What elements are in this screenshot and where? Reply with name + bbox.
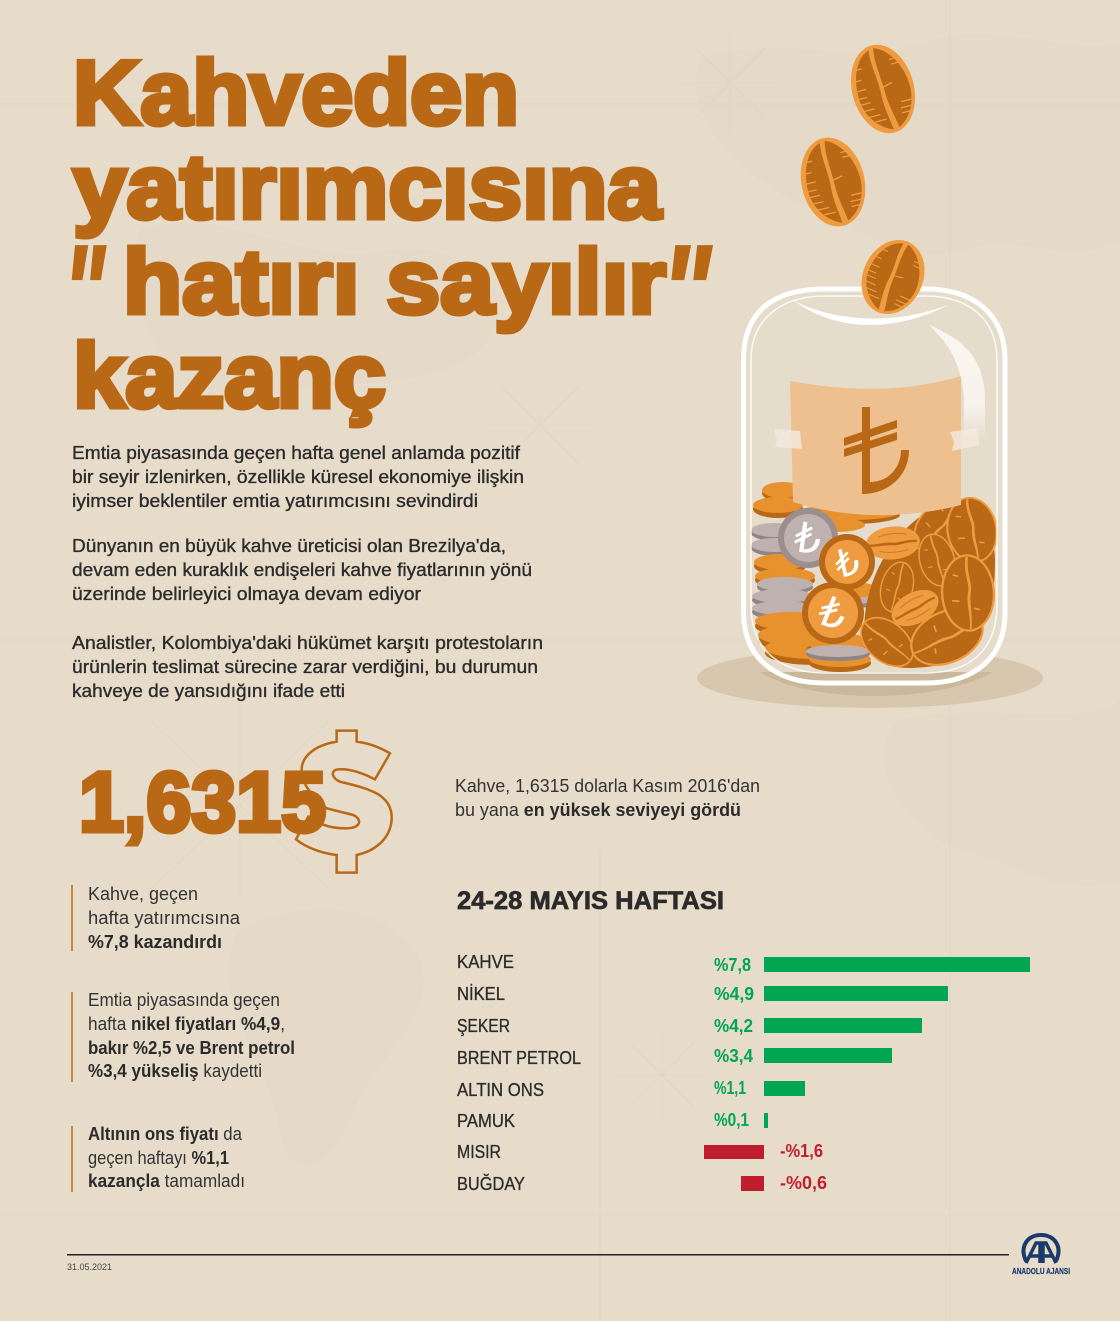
jar shadow — [697, 648, 1043, 708]
row: nikel: NİKEL — [457, 983, 505, 1004]
title: yatırımcısına — [73, 137, 662, 238]
note: coffee gain: Kahve, geçen — [88, 883, 198, 904]
footer rule — [67, 1254, 1009, 1256]
intro text: Emtia piyasasında geçen hafta genel anlamda pozitif — [72, 442, 521, 463]
intro text: bir seyir izlenirken, özellikle küresel ekonomiye ilişkin — [72, 466, 524, 487]
coin: orange lira: ₺ — [831, 541, 864, 587]
title: kazanç — [73, 326, 386, 427]
illustration: coffee beans falling into a jar — [697, 38, 1043, 708]
callout: highest level: Kahve, 1,6315 dolarla Kasım 2016'dan — [455, 775, 760, 796]
row: seker: ŞEKER — [457, 1015, 510, 1036]
note: gold: geçen haftayı %1,1 — [88, 1147, 229, 1168]
jar outline and highlights — [744, 289, 1005, 683]
logo: Anadolu Ajansi: ANADOLU AJANSI — [1012, 1266, 1070, 1276]
note: gold: kazançla tamamladı — [88, 1170, 245, 1191]
coin: orange lira tilted — [802, 582, 864, 644]
note: coffee gain — [71, 883, 241, 952]
price label — [790, 376, 961, 515]
row: altin ons: ALTIN ONS — [457, 1079, 544, 1100]
row: altin ons: %1,1 — [714, 1078, 746, 1098]
row: pamuk: PAMUK — [457, 1110, 516, 1131]
row: bugday — [457, 1173, 827, 1194]
row: misir: MISIR — [457, 1141, 501, 1162]
logo: Anadolu Ajansi — [1012, 1235, 1070, 1276]
intro text: Dünyanın en büyük kahve üreticisi olan Brezilya'da, — [72, 535, 506, 556]
note: nickel, copper, brent — [71, 989, 295, 1082]
row: seker: %4,2 — [714, 1016, 753, 1036]
title: " — [63, 218, 106, 365]
note: nickel, copper, brent: hafta nikel fiyatları %4,9, — [88, 1013, 285, 1034]
row: pamuk — [457, 1110, 768, 1131]
coin: grey lira: ₺ — [791, 513, 824, 564]
note: nickel, copper, brent: %3,4 yükseliş kaydetti — [88, 1060, 262, 1081]
jar glass — [742, 289, 1005, 683]
row: bugday: -%0,6 — [780, 1173, 827, 1193]
title: Kahveden — [73, 43, 519, 144]
title: hatırı sayılır — [123, 232, 666, 333]
note: coffee gain: hafta yatırımcısına — [88, 907, 241, 928]
title — [63, 43, 712, 427]
row: brent petrol: %3,4 — [714, 1046, 753, 1066]
callout: highest level: bu yana en yüksek seviyeyi gördü — [455, 799, 741, 820]
note: nickel, copper, brent: Emtia piyasasında geçen — [88, 989, 280, 1010]
date: 31.05.2021 — [67, 1262, 112, 1272]
intro text: iyimser beklentiler emtia yatırımcısını sevindirdi — [72, 490, 478, 511]
note: coffee gain: %7,8 kazandırdı — [88, 931, 222, 952]
row: pamuk: %0,1 — [714, 1110, 749, 1130]
note: nickel, copper, brent: bakır %2,5 ve Brent petrol — [88, 1037, 295, 1058]
intro text: devam eden kuraklık endişeleri kahve fiyatlarının yönü — [72, 559, 532, 580]
intro text — [72, 442, 543, 701]
title: " — [661, 218, 712, 365]
jar base shade — [760, 672, 993, 696]
row: misir — [457, 1141, 823, 1162]
row: bugday: BUĞDAY — [457, 1173, 525, 1194]
chart heading: 24-28 MAYIS HAFTASI — [457, 887, 724, 915]
row: kahve — [457, 951, 1030, 975]
coin stacks — [751, 482, 900, 672]
big number with dollar outline — [79, 731, 392, 873]
coin: orange lira — [819, 534, 875, 590]
row: altin ons — [457, 1078, 805, 1100]
row: misir: -%1,6 — [780, 1141, 823, 1161]
beans in jar — [850, 488, 1003, 677]
callout: highest level — [455, 775, 760, 820]
note: gold: Altının ons fiyatı da — [88, 1123, 243, 1144]
row: nikel — [457, 983, 948, 1004]
row: brent petrol — [457, 1046, 892, 1068]
bar chart: weekly change — [457, 951, 1030, 1194]
intro text: ürünlerin teslimat sürecine zarar verdiğini, bu durumun — [72, 656, 538, 677]
intro text: Analistler, Kolombiya'daki hükümet karşıtı protestoların — [72, 632, 543, 653]
coin: orange lira tilted: ₺ — [812, 587, 854, 640]
note: gold — [71, 1123, 245, 1192]
row: seker — [457, 1015, 922, 1036]
icon: lira symbol — [844, 407, 909, 494]
coin: grey lira — [778, 508, 838, 568]
big number with dollar outline: 1,6315 — [79, 755, 326, 849]
tape — [774, 428, 979, 451]
row: kahve: %7,8 — [714, 955, 751, 975]
intro text: üzerinde belirleyici olmaya devam ediyor — [72, 583, 421, 604]
row: brent petrol: BRENT PETROL — [457, 1047, 581, 1068]
row: nikel: %4,9 — [714, 984, 754, 1004]
row: kahve: KAHVE — [457, 951, 514, 972]
falling beans — [842, 38, 924, 140]
intro text: kahveye de yansıdığını ifade etti — [72, 680, 345, 701]
